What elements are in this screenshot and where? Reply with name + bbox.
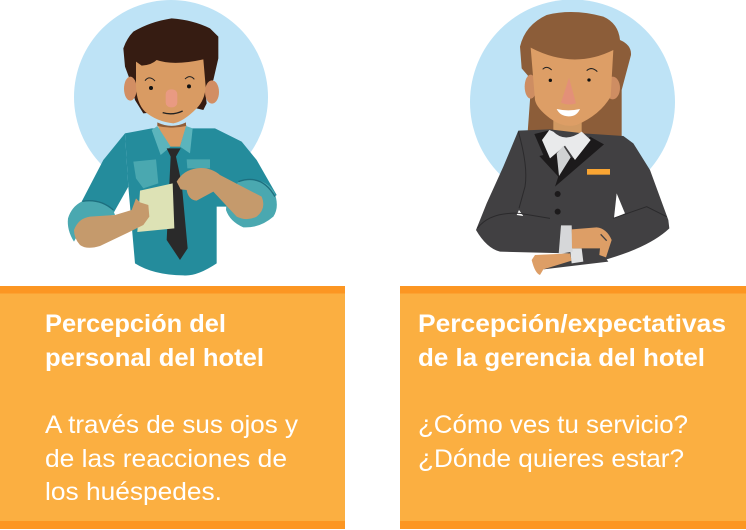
heading: staff perception: personal del hotel xyxy=(45,344,264,372)
text block: staff description xyxy=(45,411,299,506)
text block: management questions: ¿Cómo ves tu servicio? xyxy=(418,411,688,439)
text block: staff description: de las reacciones de xyxy=(45,445,287,473)
heading: staff perception xyxy=(45,310,264,372)
panel: management perception xyxy=(400,286,746,529)
panel: staff perception xyxy=(0,286,345,529)
icon: hotel staff man xyxy=(68,0,277,275)
heading: management perception: Percepción/expectativas xyxy=(418,310,726,338)
text block: staff description: los huéspedes. xyxy=(45,478,222,506)
heading: management perception: de la gerencia del hotel xyxy=(418,344,705,372)
text block: staff description: A través de sus ojos y xyxy=(45,411,299,439)
text block: management questions xyxy=(418,411,688,473)
heading: staff perception: Percepción del xyxy=(45,310,226,338)
text block: management questions: ¿Dónde quieres estar? xyxy=(418,445,684,473)
icon: hotel manager woman xyxy=(470,0,675,275)
heading: management perception xyxy=(418,310,726,372)
